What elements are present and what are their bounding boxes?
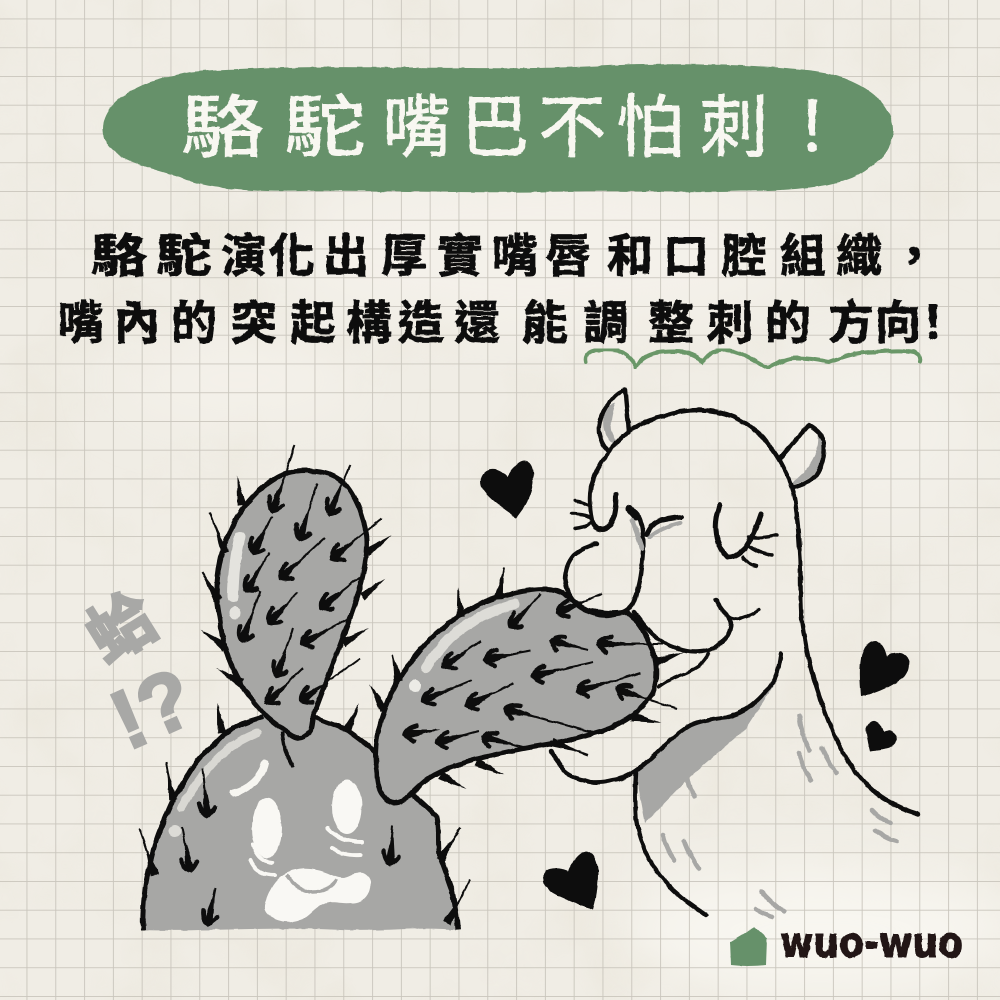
brand logo xyxy=(730,918,963,967)
body text xyxy=(58,230,956,349)
body line 1: 演化出厚實嘴唇和口腔組織， xyxy=(221,230,937,282)
cactus top pad xyxy=(202,445,382,738)
left ear xyxy=(599,390,629,450)
title text xyxy=(182,90,846,166)
lower jaw xyxy=(659,653,709,687)
exclamation: ha xyxy=(74,579,208,768)
chest line xyxy=(635,773,706,915)
banner shape xyxy=(103,64,893,192)
right ear xyxy=(781,425,824,487)
side pad outer spikes xyxy=(379,567,670,785)
title text: 駱 xyxy=(182,90,264,166)
heart right large xyxy=(860,641,909,697)
body line 2: 嘴內的突起構造還能調整刺的方向！ xyxy=(58,297,956,349)
logo house icon xyxy=(730,927,767,966)
title text: 駝 xyxy=(284,90,366,166)
wavy green underline xyxy=(586,350,920,368)
side pad inner spines xyxy=(406,594,677,755)
right eyelashes xyxy=(743,535,777,566)
left eyelashes xyxy=(572,501,591,528)
heart top xyxy=(481,461,533,518)
top pad outer spikes xyxy=(202,482,382,683)
cactus bottom pad with face xyxy=(139,707,470,930)
brow line xyxy=(647,517,681,534)
body line 1: 駝 xyxy=(156,231,212,282)
side pad highlights xyxy=(426,604,515,668)
camel neck shadow xyxy=(636,685,774,823)
top pad highlights xyxy=(233,537,240,597)
logo wordmark: wuo-wuo xyxy=(780,918,963,967)
eye ripples xyxy=(250,828,362,875)
pad edge highlights xyxy=(181,733,257,808)
title text: 嘴巴不怕刺！ xyxy=(383,90,846,166)
heart right small xyxy=(866,721,897,751)
cactus eyes xyxy=(252,798,282,858)
cactus mouth xyxy=(264,869,371,922)
bottom pad body xyxy=(143,717,458,930)
title banner xyxy=(103,64,893,192)
ha character: 蛤 xyxy=(74,579,169,676)
top pad inner spines xyxy=(243,445,382,702)
fur ticks xyxy=(663,716,897,917)
surprise marks: !? xyxy=(97,649,208,768)
cactus side pad being eaten xyxy=(376,567,677,803)
side pad body xyxy=(376,589,656,803)
body line 1: 駱 xyxy=(91,231,147,282)
smile crease xyxy=(724,610,759,619)
heart bottom xyxy=(543,851,598,910)
nose shadow xyxy=(632,520,642,548)
right closed eye xyxy=(716,505,761,557)
bottom pad spines xyxy=(139,707,470,923)
hearts xyxy=(481,461,909,910)
camel head and back outline xyxy=(590,410,918,814)
cactus illustration xyxy=(139,445,470,930)
mouth line xyxy=(634,600,731,651)
neck and cheek line xyxy=(552,653,781,782)
camel xyxy=(552,390,918,917)
left closed eye xyxy=(593,494,616,530)
nose and muzzle xyxy=(565,509,643,616)
top pad body xyxy=(217,470,367,738)
